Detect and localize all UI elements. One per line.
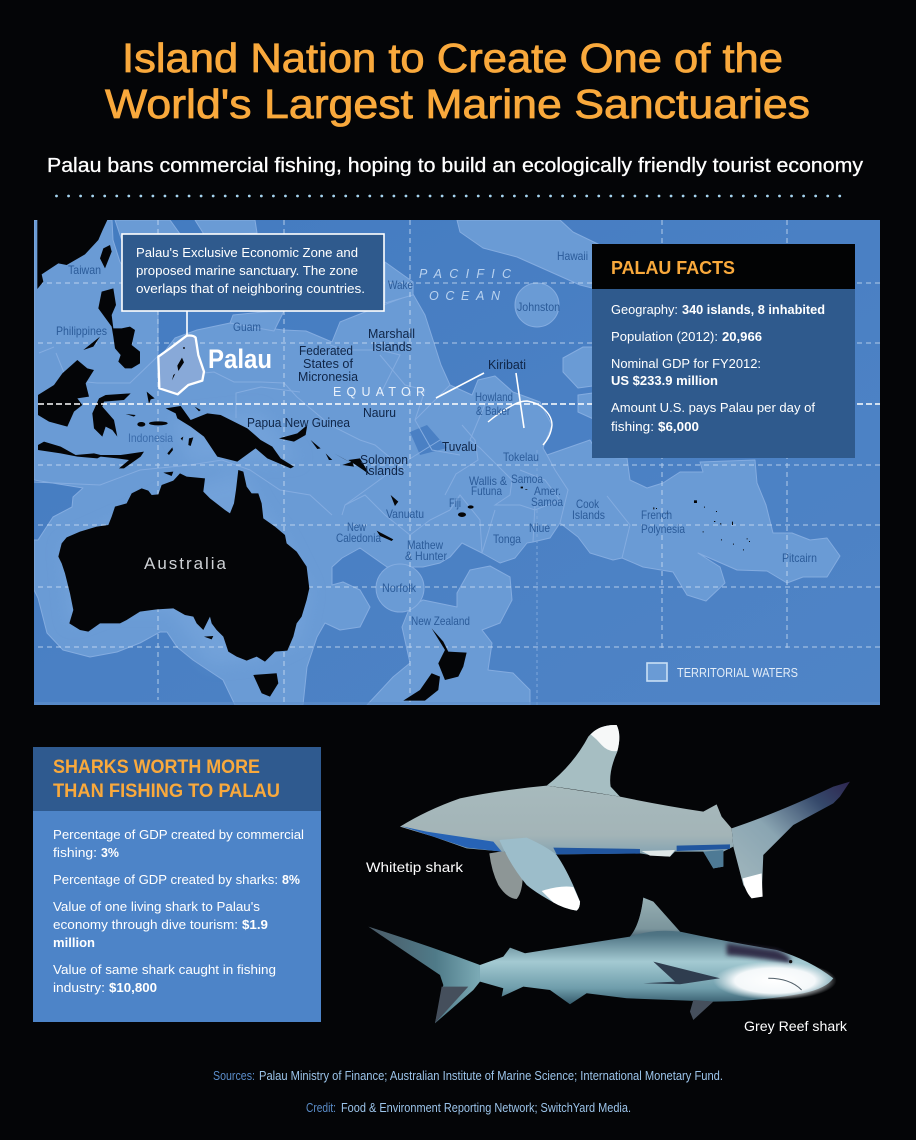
map labels: Marshall — [368, 327, 415, 341]
title — [105, 35, 810, 127]
map labels: Tokelau — [503, 450, 539, 464]
map labels: Guam — [233, 320, 261, 334]
panel: Palau facts: 20,966 — [722, 330, 762, 344]
panel: sharks worth more: million — [53, 936, 95, 950]
label: grey reef shark: Grey Reef shark — [744, 1018, 848, 1034]
illustration: whitetip shark — [400, 725, 850, 911]
Pacific islets — [458, 487, 750, 550]
map labels: Cook — [576, 497, 600, 511]
map labels: Islands — [572, 508, 605, 522]
map labels — [56, 249, 817, 628]
map labels: Solomon — [360, 453, 408, 467]
map labels: Mathew — [407, 538, 443, 552]
map labels: Philippines — [56, 324, 107, 338]
map labels: Hawaii — [557, 249, 588, 263]
callout: exclusive economic zone — [122, 234, 384, 311]
map labels: Papua New Guinea — [247, 416, 350, 430]
map labels: Norfolk — [382, 581, 417, 595]
map labels: OCEAN — [429, 289, 501, 303]
map labels: Polynesia — [641, 522, 685, 536]
panel: sharks worth more: Percentage of GDP created by commercial — [53, 828, 304, 842]
panel: Palau facts: 340 islands, 8 inhabited — [682, 303, 825, 317]
subtitle: Palau bans commercial fishing, hoping to build an ecologically friendly tourist economy — [47, 155, 863, 177]
panel: sharks worth more: Percentage of GDP created by sharks: — [53, 873, 278, 887]
panel: sharks worth more: economy through dive tourism: — [53, 918, 238, 932]
panel: Palau facts: Population (2012): — [611, 330, 718, 344]
panel: sharks worth more: 8% — [282, 873, 300, 887]
panel: Palau facts — [592, 244, 855, 458]
title: World's Largest Marine Sanctuaries — [105, 81, 810, 127]
label: Australia: Australia — [144, 554, 227, 573]
panel: sharks worth more: fishing: — [53, 846, 97, 860]
callout: exclusive economic zone: overlaps that of neighboring countries. — [136, 282, 365, 296]
panel: map — [34, 220, 880, 705]
map labels: Amer. — [534, 484, 561, 498]
map labels: & Hunter — [405, 549, 447, 563]
callout leader line — [186, 311, 188, 336]
map labels: Indonesia — [128, 431, 173, 445]
panel: sharks worth more: $10,800 — [109, 981, 157, 995]
illustration: grey reef shark — [368, 898, 837, 1023]
territorial waters — [34, 220, 840, 705]
land: Indonesia and New Guinea — [38, 360, 354, 468]
legend: territorial waters — [647, 663, 798, 681]
map labels: States of — [303, 357, 354, 371]
map labels: Niue — [529, 521, 550, 535]
land: Australia and New Zealand — [58, 458, 467, 701]
map labels: Taiwan — [68, 263, 101, 277]
EEZ boundary lines — [34, 345, 630, 558]
map labels: New Zealand — [411, 614, 470, 628]
map labels: Kiribati — [488, 358, 526, 372]
sources: Sources: — [213, 1069, 255, 1083]
panel: sharks worth more: Value of one living shark to Palau's — [53, 900, 260, 914]
callout: exclusive economic zone: Palau's Exclusive Economic Zone and — [136, 246, 358, 260]
map labels: Samoa — [511, 472, 543, 486]
panel: sharks worth more: $1.9 — [242, 918, 268, 932]
panel: sharks worth more: Value of same shark caught in fishing — [53, 963, 276, 977]
map labels: EQUATOR — [333, 385, 425, 399]
map labels: New — [347, 520, 366, 534]
legend: territorial waters: TERRITORIAL WATERS — [677, 665, 798, 680]
panel: sharks worth more — [33, 747, 321, 1022]
map labels: Tonga — [493, 532, 521, 546]
land: north Asia, Taiwan and Philippines — [37, 220, 140, 368]
heading: sharks worth more — [53, 757, 280, 802]
map labels: French — [641, 508, 672, 522]
map labels: Samoa — [531, 495, 563, 509]
credit: Credit: — [306, 1101, 336, 1115]
map labels: PACIFIC — [419, 267, 512, 281]
Palau zone — [158, 336, 204, 394]
map labels: Futuna — [471, 484, 502, 498]
map labels: Pitcairn — [782, 551, 817, 565]
glow around land — [62, 410, 310, 665]
credit: Food & Environment Reporting Network; SwitchYard Media. — [341, 1101, 631, 1115]
panel: Palau facts: Geography: — [611, 303, 678, 317]
panel: Palau facts: Amount U.S. pays Palau per day of — [611, 401, 816, 415]
darker patch near Nauru — [410, 425, 447, 455]
heading: sharks worth more: SHARKS WORTH MORE — [53, 757, 260, 778]
panel: Palau facts: US $233.9 million — [611, 374, 718, 388]
grid lines — [38, 220, 880, 705]
heading: Palau facts: PALAU FACTS — [611, 258, 735, 278]
map labels: Howland — [475, 390, 513, 404]
heading: sharks worth more: THAN FISHING TO PALAU — [53, 781, 280, 802]
Kiribati leader lines — [436, 373, 552, 445]
panel: Palau facts: $6,000 — [658, 420, 699, 434]
map labels: & Baker — [476, 404, 510, 418]
panel: sharks worth more: 3% — [101, 846, 119, 860]
map labels: Johnston — [517, 300, 560, 314]
map labels: Nauru — [363, 406, 396, 420]
map labels: Tuvalu — [442, 440, 477, 454]
map labels: Federated — [299, 344, 353, 358]
label: Palau: Palau — [208, 344, 272, 374]
map labels: Micronesia — [298, 370, 358, 384]
map labels: Islands — [372, 340, 412, 354]
panel: sharks worth more: industry: — [53, 981, 105, 995]
callout: exclusive economic zone: proposed marine sanctuary. The zone — [136, 264, 358, 278]
map labels: Islands — [365, 464, 404, 478]
equator line — [38, 403, 880, 405]
map labels: Caledonia — [336, 531, 381, 545]
map labels: Wake — [388, 278, 413, 292]
panel: Palau facts: Nominal GDP for FY2012: — [611, 357, 761, 371]
sources: Palau Ministry of Finance; Australian Institute of Marine Science; International Monetary Fund. — [259, 1069, 723, 1083]
panel: Palau facts: fishing: — [611, 420, 654, 434]
map labels: Fiji — [449, 496, 461, 510]
title: Island Nation to Create One of the — [122, 35, 783, 81]
map labels: Vanuatu — [386, 507, 424, 521]
map labels: Wallis & — [469, 474, 507, 488]
label: whitetip shark: Whitetip shark — [366, 859, 464, 875]
